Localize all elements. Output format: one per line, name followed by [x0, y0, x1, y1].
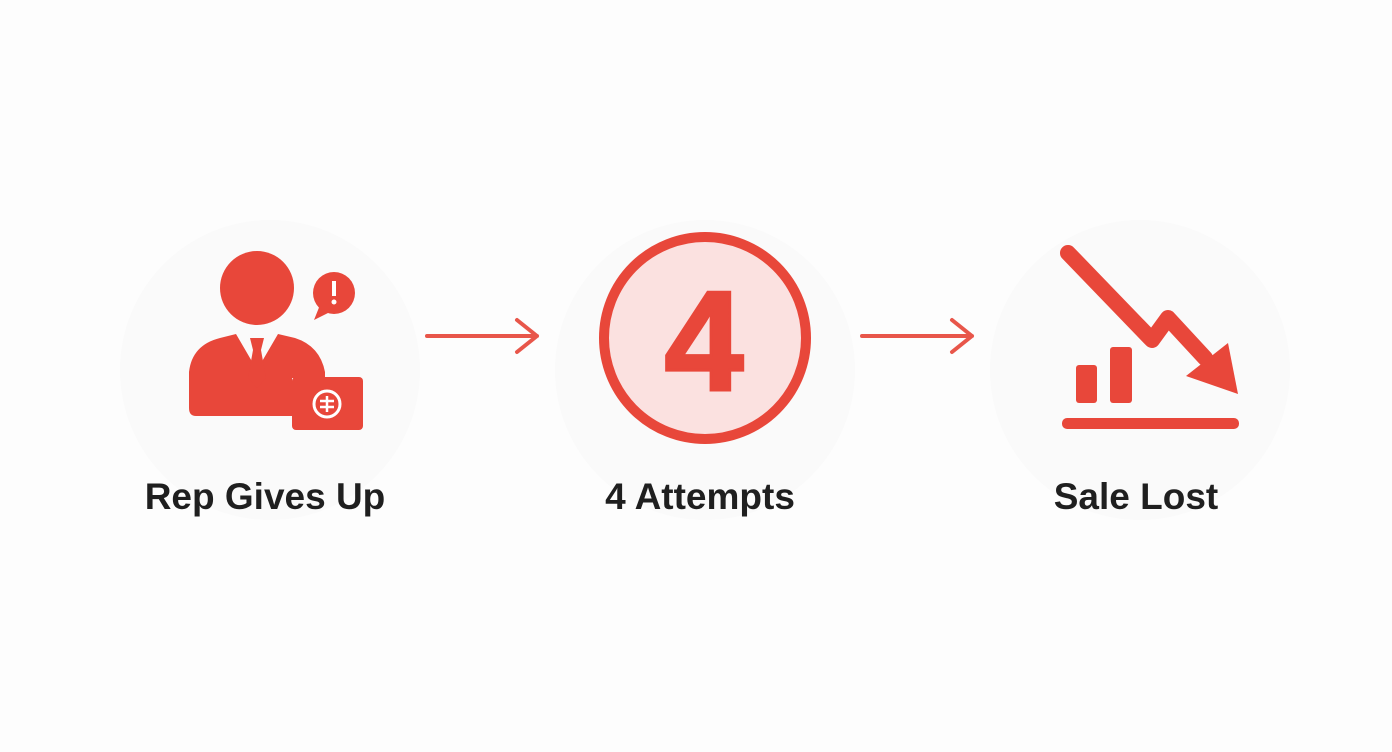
- arrow 2: [862, 320, 972, 352]
- label: Rep Gives Up: Rep Gives Up: [145, 476, 385, 517]
- icon: declining chart: [1062, 253, 1239, 429]
- arrow 1: [427, 320, 537, 352]
- icon: circle 4: [604, 237, 806, 439]
- label: Sale Lost: Sale Lost: [1054, 476, 1218, 517]
- label: 4 Attempts: 4 Attempts: [605, 476, 795, 517]
- icon: rep with alert: [189, 251, 363, 430]
- icon: circle 4: 4: [665, 262, 744, 421]
